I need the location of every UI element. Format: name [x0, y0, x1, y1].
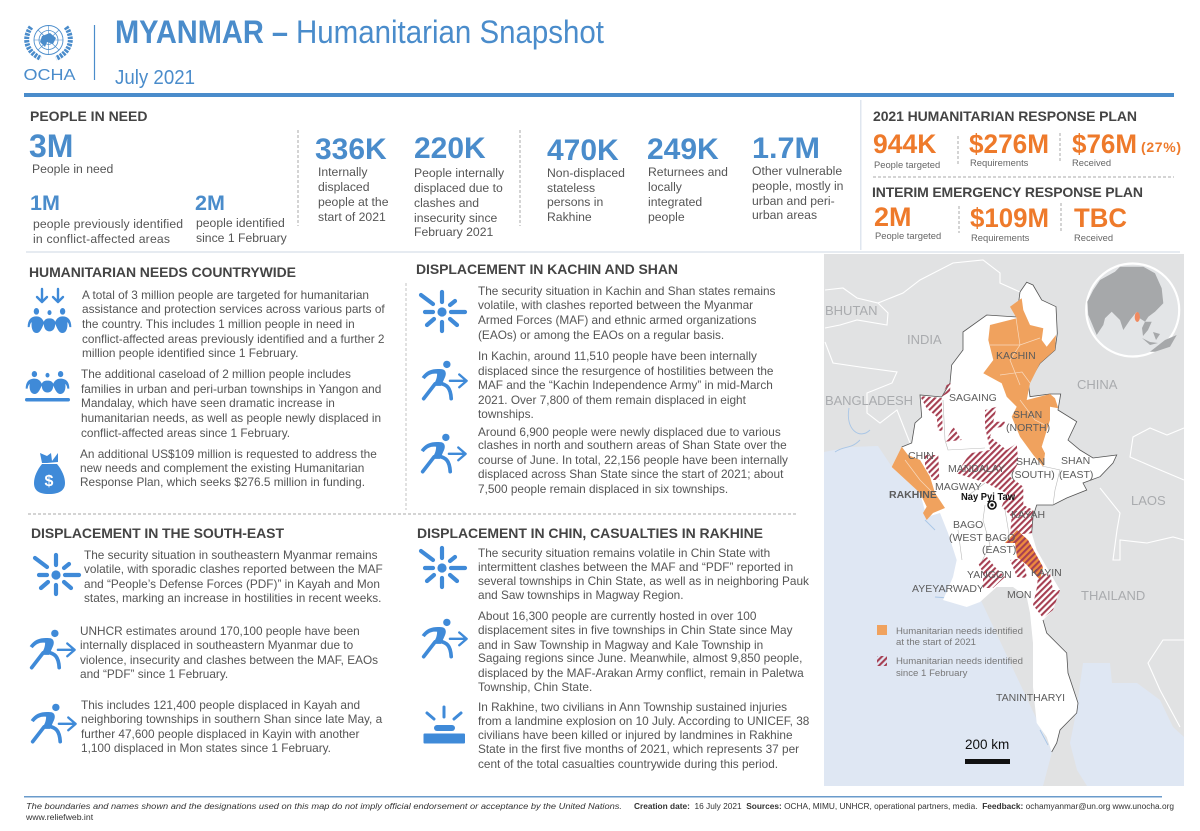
- header: OCHA logo: [24, 26, 76, 84]
- text block: volatile, with clashes reported between the Myanmar: [478, 298, 753, 312]
- map: country labels: [825, 303, 1166, 603]
- text block: clashes in north and southern areas of Shan State over the: [478, 438, 787, 452]
- icon: money bag: $: [45, 473, 54, 490]
- text block: and Saw townships in Magway Region.: [478, 588, 684, 602]
- stat: received: $76M: [1072, 129, 1137, 159]
- icon: displaced person: [30, 630, 75, 668]
- stat: received: (27%): [1141, 139, 1181, 155]
- text block: assistance and protection services across various parts of: [82, 302, 385, 316]
- stat: 2M: people identified: [196, 216, 285, 230]
- stat: received: Received: [1074, 232, 1113, 243]
- map: region labels: RAKHINE: [889, 489, 937, 501]
- map: Myanmar humanitarian needs: [824, 254, 1184, 786]
- map: land border outline: [1020, 282, 1117, 533]
- text block: [478, 700, 810, 771]
- stat: 1.7M: urban and peri-: [752, 194, 835, 208]
- text block: [478, 425, 788, 496]
- text block: [80, 447, 377, 489]
- stat: 3M: [29, 128, 113, 176]
- heading: IERP: INTERIM EMERGENCY RESPONSE PLAN: [872, 184, 1143, 200]
- stat: received: [1072, 129, 1181, 168]
- text block: [84, 548, 383, 605]
- stat: 220K: insecurity since: [414, 211, 498, 225]
- text block: 7,500 people remain displaced in six townships.: [478, 482, 728, 496]
- map: region labels: SHAN: [1016, 456, 1045, 468]
- panel: displacement in Kachin and Shan: [416, 261, 788, 496]
- icon: UN emblem: [27, 26, 70, 58]
- text block: The security situation remains volatile in Chin State with: [478, 546, 770, 560]
- map: sea: [824, 446, 1184, 786]
- stat: 2M: [195, 191, 288, 245]
- map: scale bar: 200 km: [965, 737, 1009, 752]
- stat: requirements: $276M: [969, 129, 1049, 159]
- text block: new needs and complement the existing Humanitarian: [80, 461, 364, 475]
- text block: displaced since the resurgence of hostilities between the: [478, 364, 774, 378]
- text block: internally displaced in southeastern Myanmar due to: [80, 638, 354, 652]
- map: rivers and islands: [835, 408, 1050, 745]
- heading: 2021 HRP: 2021 HUMANITARIAN RESPONSE PLAN: [873, 108, 1137, 124]
- panel: displacement in Chin, casualties in Rakhine: [417, 525, 810, 771]
- text block: [82, 288, 385, 360]
- text block: The security situation in southeastern Myanmar remains: [84, 548, 378, 562]
- text block: course of June. In total, 22,156 people have been internally: [478, 453, 788, 467]
- text block: [478, 349, 774, 421]
- heading: DISPLACEMENT IN KACHIN AND SHAN: [416, 261, 678, 277]
- icon: displaced person: [422, 361, 467, 399]
- heading: PEOPLE IN NEED: [30, 108, 147, 124]
- stat: 220K: [414, 132, 505, 239]
- heading: DISPLACEMENT IN THE SOUTH-EAST: [31, 525, 284, 541]
- stat: 336K: displaced: [318, 180, 370, 194]
- text block: In Kachin, around 11,510 people have been internally: [478, 349, 757, 363]
- map: legend: Humanitarian needs identified: [896, 626, 1023, 637]
- text block: Around 6,900 people were newly displaced due to various: [478, 425, 781, 439]
- stat: 470K: [547, 134, 625, 224]
- stat: 336K: 336K: [315, 133, 387, 166]
- stat: 470K: 470K: [547, 134, 619, 167]
- logo wordmark: OCHA: [24, 67, 76, 84]
- stat: 1.7M: [752, 132, 843, 222]
- map: region labels: (EAST): [982, 544, 1016, 556]
- title: Humanitarian Snapshot: [296, 14, 604, 50]
- map: region labels: TANINTHARYI: [996, 692, 1065, 704]
- icon: arrows and family: [28, 289, 71, 333]
- text block: The additional caseload of 2 million people includes: [81, 367, 351, 381]
- stat: 249K: Returnees and: [648, 165, 728, 179]
- stat: people targeted: People targeted: [874, 159, 940, 170]
- stat: 470K: stateless: [547, 181, 595, 195]
- text block: The security situation in Kachin and Shan states remains: [478, 284, 776, 298]
- stat: 2M: since 1 February: [196, 231, 288, 245]
- stat: 336K: start of 2021: [318, 210, 386, 224]
- stat: received: TBC: [1074, 203, 1127, 233]
- icon: landmine explosion: [424, 707, 465, 744]
- text block: [478, 284, 776, 342]
- heading: HUMANITARIAN NEEDS COUNTRYWIDE: [29, 264, 296, 280]
- map: region labels: MAGWAY: [935, 481, 982, 493]
- footer text: The boundaries and names shown and the designations used on this map do not imply official endorsement or acceptance by the United Nations.: [26, 801, 622, 811]
- text block: and “PDF” since 1 February.: [80, 667, 228, 681]
- stat: 470K: persons in: [547, 195, 603, 209]
- text block: displaced across Shan State since the start of 2021; about: [478, 467, 784, 481]
- map: internal boundaries: [905, 318, 1045, 495]
- map: legend: since 1 February: [896, 668, 968, 679]
- stat: 249K: locally: [648, 180, 683, 194]
- stat: 1.7M: Other vulnerable: [752, 164, 842, 178]
- text block: [478, 546, 809, 602]
- text block: A total of 3 million people are targeted for humanitarian: [82, 288, 369, 302]
- map: country labels: LAOS: [1131, 493, 1166, 508]
- map: needs since 1 February: [920, 383, 1060, 618]
- map: legend: at the start of 2021: [896, 637, 976, 648]
- panel: displacement in the south-east: [30, 525, 383, 755]
- stat: people targeted: People targeted: [875, 230, 941, 241]
- icon: clashes burst: [35, 555, 79, 594]
- stat: 336K: Internally: [318, 165, 368, 179]
- stat: received: Received: [1072, 157, 1111, 168]
- icon: clashes burst: [421, 548, 465, 587]
- map: region labels: SAGAING: [949, 392, 997, 404]
- stat: people targeted: 944K: [873, 129, 936, 159]
- map: region labels: KAYAH: [1011, 509, 1045, 521]
- text block: townships.: [478, 407, 534, 421]
- text block: UNHCR estimates around 170,100 people have been: [80, 624, 360, 638]
- map: region labels: [889, 350, 1093, 704]
- stat: 1M: [30, 191, 183, 246]
- stat: 249K: [647, 133, 728, 224]
- text block: An additional US$109 million is requested to address the: [80, 447, 377, 461]
- map: region labels: BAGO: [953, 519, 983, 531]
- text block: This includes 121,400 people displaced in Kayah and: [81, 698, 360, 712]
- stat: 336K: people at the: [318, 195, 389, 209]
- map: region labels: SHAN: [1061, 455, 1090, 467]
- stat: people targeted: [873, 129, 940, 170]
- text block: from a landmine explosion on 10 July. According to UNICEF, 38: [478, 714, 810, 728]
- map: region labels: KACHIN: [996, 350, 1036, 362]
- text block: neighboring townships in southern Shan since late May, a: [81, 712, 383, 726]
- text block: Sagaing regions since June. Meanwhile, almost 9,850 people,: [478, 651, 802, 665]
- text block: humanitarian needs, as well as people newly displaced in: [81, 411, 381, 425]
- map: Myanmar territory: [892, 282, 1117, 752]
- text block: Response Plan, which seeks $276.5 million in funding.: [80, 475, 365, 489]
- map: region labels: SHAN: [1013, 409, 1042, 421]
- title: MYANMAR –: [115, 14, 288, 50]
- map: region labels: BAGO: [985, 532, 1015, 544]
- panel: response plans: [872, 108, 1181, 243]
- footer text: [25, 801, 1174, 822]
- text block: In Rakhine, two civilians in Ann Township sustained injuries: [478, 700, 787, 714]
- text block: further 47,600 people displaced in Kayin with another: [81, 727, 360, 741]
- stat: 3M: 3M: [29, 128, 73, 164]
- text block: About 16,300 people are currently hosted in over 100: [478, 609, 757, 623]
- map: region labels: (EAST): [1059, 469, 1093, 481]
- text block: states, marking an increase in hostilities in recent weeks.: [84, 591, 381, 605]
- map: country labels: INDIA: [907, 332, 942, 347]
- icon: clashes burst: [421, 292, 465, 331]
- text block: volatile, with sporadic clashes reported between the MAF: [84, 562, 383, 576]
- stat: requirements: $109M: [970, 203, 1049, 233]
- map: region labels: (WEST: [949, 532, 983, 544]
- stat: 470K: Rakhine: [547, 210, 592, 224]
- icon: family on platform: [25, 371, 70, 402]
- text block: and “People’s Defense Forces (PDF)” in Kayah and Mon: [84, 577, 380, 591]
- stat: people targeted: 2M: [874, 202, 912, 232]
- stat: 1.7M: people, mostly in: [752, 179, 843, 193]
- footer text: Creation date: 16 July 2021 Sources: OCHA, MIMU, UNHCR, operational partners, media. Feedback: ochamyanmar@un.org www.unocha.org: [634, 801, 1174, 811]
- stat: 220K: 220K: [414, 132, 486, 165]
- map: region labels: KAYIN: [1031, 567, 1062, 579]
- map: capital: Nay Pyi Taw: [961, 491, 1016, 503]
- map: legend: [877, 625, 1023, 679]
- text block: Armed Forces (MAF) and ethnic armed organizations: [478, 313, 756, 327]
- map: region labels: CHIN: [908, 450, 934, 462]
- heading: DISPLACEMENT IN CHIN, CASUALTIES IN RAKHINE: [417, 525, 763, 541]
- stat: 220K: displaced due to: [414, 181, 503, 195]
- map: region labels: MANDALAY: [948, 463, 1005, 475]
- text block: [81, 698, 383, 755]
- text block: 2021. Over 7,800 of them remain displaced in eight: [478, 393, 747, 407]
- map: region labels: MON: [1007, 589, 1032, 601]
- stat: people targeted: [874, 202, 941, 241]
- map: region labels: YANGON: [967, 569, 1012, 581]
- map: region labels: (SOUTH): [1011, 469, 1055, 481]
- text block: 1,100 displaced in Mon states since 1 February.: [81, 741, 331, 755]
- text block: (EAOs) or among the EAOs on a regular basis.: [478, 328, 724, 342]
- stat: 220K: People internally: [414, 166, 505, 180]
- icon: money bag: [34, 453, 65, 494]
- text block: MAF and the “Kachin Independence Army” in mid-March: [478, 378, 773, 392]
- text block: [478, 609, 804, 694]
- stat: 249K: people: [648, 210, 685, 224]
- panel: people in need: [29, 108, 843, 246]
- map: country labels: CHINA: [1077, 377, 1118, 392]
- map: legend: Humanitarian needs identified: [896, 656, 1023, 667]
- stat: 1.7M: 1.7M: [752, 132, 820, 165]
- stat: 249K: 249K: [647, 133, 719, 166]
- map: country labels: BHUTAN: [825, 303, 877, 318]
- text block: [80, 624, 378, 681]
- stat: 470K: Non-displaced: [547, 166, 625, 180]
- text block: conflict-affected areas previously identified and a further 2: [82, 332, 384, 346]
- stat: 220K: February 2021: [414, 225, 493, 239]
- map: capital: [961, 491, 1016, 509]
- stat: 3M: People in need: [32, 162, 113, 176]
- text block: intermittent clashes between the MAF and “PDF” reported in: [478, 560, 793, 574]
- stat: requirements: Requirements: [971, 232, 1030, 243]
- text block: cent of the total casualties countrywide during this period.: [478, 757, 778, 771]
- footer text: www.reliefweb.int: [25, 812, 94, 822]
- map: locator globe: [1086, 264, 1179, 356]
- text block: million people identified since 1 February.: [82, 346, 298, 360]
- map: neighbouring borders: [825, 260, 1184, 727]
- stat: 1.7M: urban areas: [752, 208, 817, 222]
- map: needs at start of 2021: [892, 298, 1058, 580]
- panel: humanitarian needs countrywide: [25, 264, 385, 494]
- text block: the country. This includes 1 million people in need in: [82, 317, 355, 331]
- icon: displaced person: [31, 704, 76, 742]
- text block: Township, Chin State.: [478, 680, 592, 694]
- footer rule: [24, 796, 1162, 798]
- stat: 2M: 2M: [195, 191, 225, 215]
- text block: [81, 367, 381, 440]
- icon: displaced person: [421, 434, 466, 472]
- text block: civilians have been killed or injured by landmines in Rakhine: [478, 728, 793, 742]
- stat: 1M: in conflict-affected areas: [33, 232, 170, 246]
- map: country labels: BANGLADESH: [825, 393, 913, 408]
- text block: families in urban and peri-urban townships in Yangon and: [81, 382, 381, 396]
- text block: and in Saw Township in Magway and Kale Township in: [478, 638, 763, 652]
- text block: conflict-affected areas since 1 February.: [81, 426, 290, 440]
- text block: State in the first five months of 2021, which represents 37 per: [478, 742, 799, 756]
- stat: 220K: clashes and: [414, 196, 479, 210]
- stat: 249K: integrated: [648, 195, 702, 209]
- title: [115, 14, 604, 50]
- text block: Mandalay, which have seen dramatic increase in: [81, 396, 335, 410]
- stat: 1M: 1M: [30, 191, 60, 215]
- map: country labels: THAILAND: [1081, 588, 1145, 603]
- map: region labels: (NORTH): [1006, 422, 1050, 434]
- icon: displaced person: [422, 619, 467, 657]
- date: July 2021: [115, 67, 195, 89]
- stat: requirements: Requirements: [970, 157, 1029, 168]
- text block: violence, insecurity and clashes between the MAF, EAOs: [80, 653, 378, 667]
- text block: several townships in Chin State, as well as in neighboring Pauk: [478, 574, 809, 588]
- stat: 336K: [315, 133, 389, 224]
- stat: 1M: people previously identified: [33, 217, 183, 231]
- text block: displaced by the MAF-Arakan Army conflict, remain in Paletwa: [478, 666, 804, 680]
- map: region labels: AYEYARWADY: [912, 583, 984, 595]
- text block: displacement sites in five townships in Chin State since May: [478, 623, 793, 637]
- map: scale bar: [965, 737, 1010, 764]
